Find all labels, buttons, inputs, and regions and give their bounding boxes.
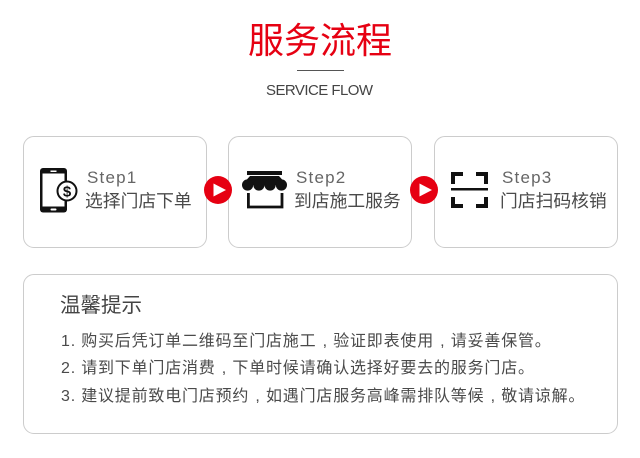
tips heading: 温馨提示 xyxy=(60,294,142,317)
arrow: step 1 to 2 xyxy=(204,176,232,204)
tip 2: 2. 请到下单门店消费 下单时候请确认选择好要去的服务门店。 xyxy=(61,360,535,377)
panel: step 1 xyxy=(23,136,207,248)
step 2 text: 到店施工服务 xyxy=(294,191,401,211)
step 1 label: Step1 xyxy=(87,168,137,187)
panel: step 2 xyxy=(228,136,412,248)
icon: phone with dollar coin: $ xyxy=(63,184,72,200)
icon: scan frame xyxy=(451,172,488,208)
title: 服务流程 xyxy=(248,20,392,61)
step 3 text: 门店扫码核销 xyxy=(500,191,607,211)
tip 1: , xyxy=(440,333,445,350)
panel: step 3 xyxy=(434,136,618,248)
step 3 label: Step3 xyxy=(502,168,552,187)
tip 1: , xyxy=(323,333,327,350)
step 2 label: Step2 xyxy=(296,168,346,187)
tip 1: 1. 购买后凭订单二维码至门店施工 验证即表使用 请妥善保管。 xyxy=(61,333,552,350)
step 1 text: 选择门店下单 xyxy=(85,191,192,211)
panel: tips xyxy=(23,274,618,434)
tip 3: 3. 建议提前致电门店预约 如遇门店服务高峰需排队等候 敬请谅解。 xyxy=(61,388,585,405)
tip 3: , xyxy=(491,388,495,405)
arrow: step 2 to 3 xyxy=(410,176,438,204)
tip 3: , xyxy=(255,388,260,405)
tip 2: , xyxy=(222,360,226,377)
subtitle: service flow: SERVICE FLOW xyxy=(266,82,372,99)
icon: phone with dollar coin xyxy=(40,168,78,212)
icon: storefront xyxy=(242,171,287,208)
